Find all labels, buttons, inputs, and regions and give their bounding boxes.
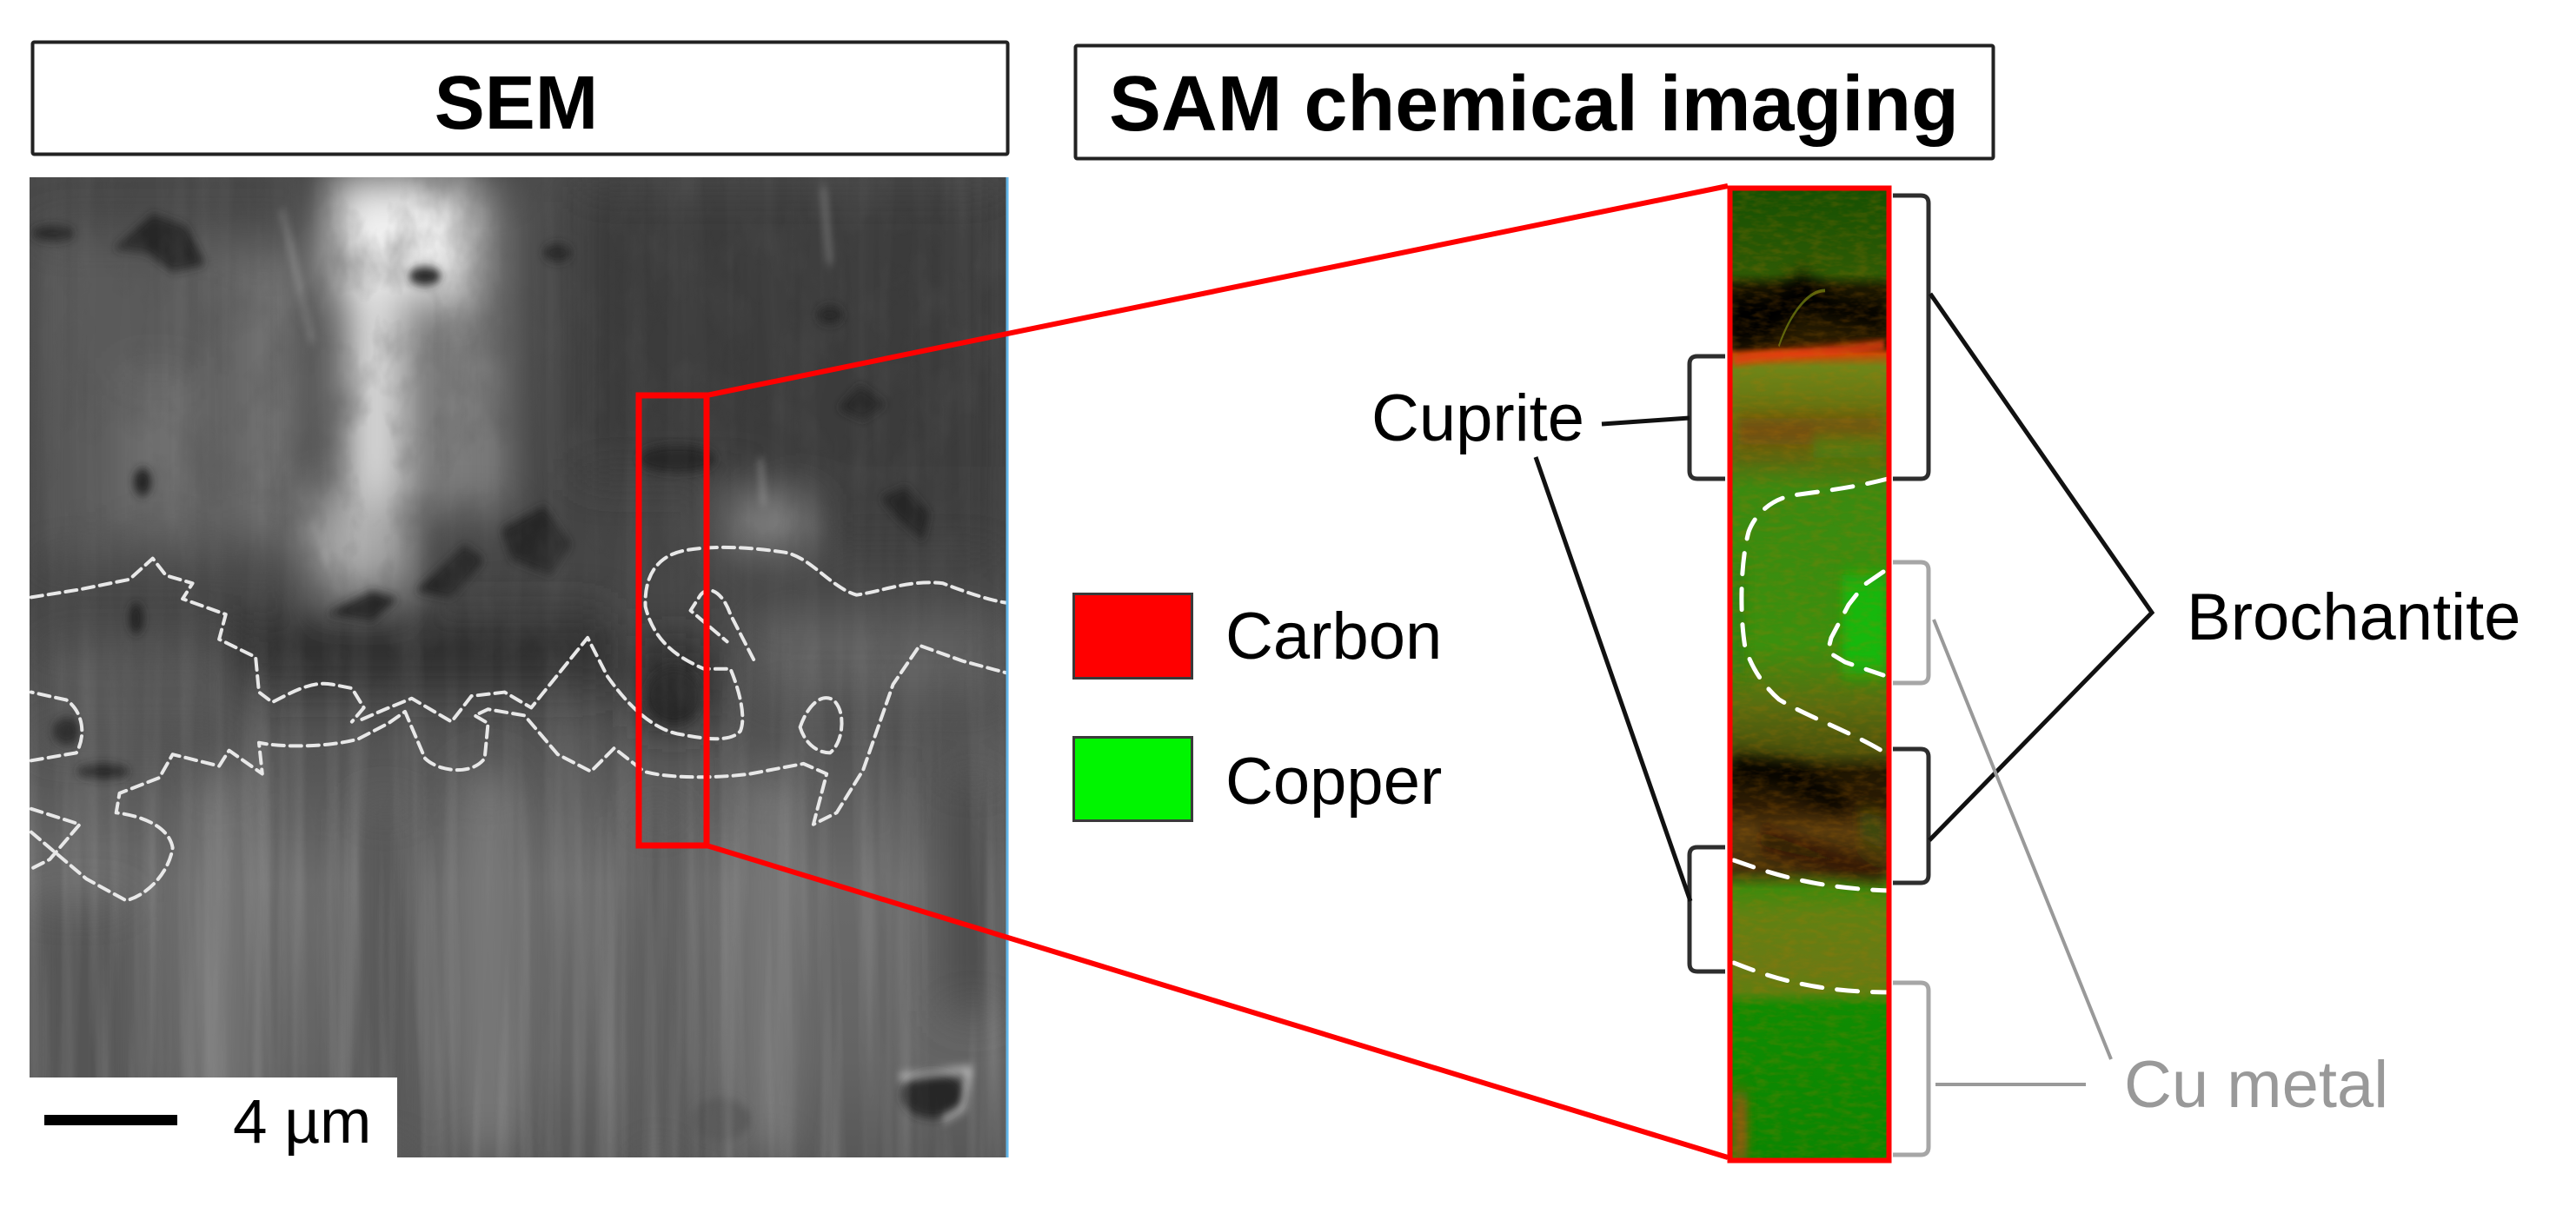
label: Brochantite with leader lines: Brochantite [2187,580,2520,654]
vertical striations [30,638,1005,1157]
heading: SEM: SEM [435,61,598,145]
label: Cuprite with leader lines: Cuprite [1371,381,1584,455]
panel: SAM heading: SAM chemical imaging [1109,61,1959,148]
panel: SEM [29,42,1008,1159]
legend item: Carbon [1074,594,1442,678]
map tonal features [1733,275,1886,1164]
zoom region: connector from SEM to SAM strip [639,186,1728,1157]
image right edge line [1006,177,1008,1157]
label: Cuprite with leader lines [1371,381,1690,901]
legend [1074,594,1442,820]
dark pits [32,214,965,1142]
scale bar: 4 µm [233,1088,371,1157]
bright diagonal ridges [282,187,830,591]
heading: SEM [33,42,1008,155]
mottled surface texture [130,177,683,694]
dashed white phase boundaries [1734,479,1892,992]
brackets: Brochantite [1893,196,1929,883]
brackets: Cuprite [1690,356,1725,971]
legend item: Carbon: Carbon [1225,600,1442,673]
scale bar [30,1077,397,1157]
dashed layer boundaries [30,547,1006,900]
strip border [1730,188,1889,1161]
pit highlight [900,1070,969,1120]
legend item: Copper [1074,737,1442,820]
legend item: Copper: Copper [1225,745,1442,819]
label: Cu metal with leader lines: Cu metal [2124,1048,2388,1122]
label: Cu metal with leader lines [1934,620,2388,1122]
label: Brochantite with leader lines [1929,294,2520,840]
bright charging column and tonal regions [29,177,1003,1159]
SEM micrograph [29,177,1008,1159]
brackets: Cu metal [1893,562,1929,1155]
map grain [1730,186,1889,1163]
SAM chemical map strip [1727,186,1892,1164]
